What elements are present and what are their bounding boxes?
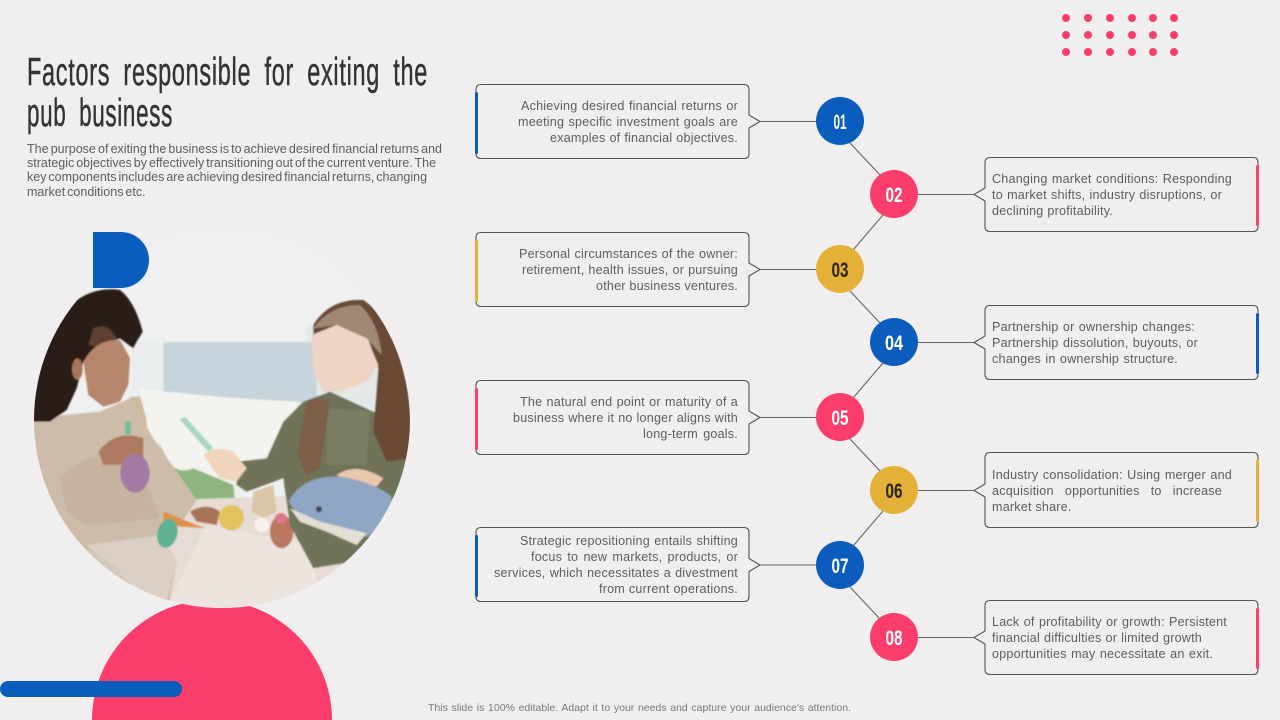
node 04: 04 (885, 332, 903, 355)
decorative pink semicircle (92, 600, 332, 720)
node 02: 02 (886, 184, 902, 207)
connector lines (760, 122, 974, 638)
intro text: key components includes are achieving desired financial returns, changing (27, 170, 427, 184)
decorative blue bar (0, 681, 182, 697)
card 04 (974, 306, 1259, 380)
left hand, eggplant (98, 435, 143, 465)
node 06: 06 (886, 480, 902, 503)
whale (288, 477, 392, 537)
card 01: Achieving desired financial returns or (521, 99, 738, 113)
card 08: opportunities may necessitate an exit. (992, 647, 1213, 661)
right girl hair (313, 300, 412, 462)
card 07: from current operations. (599, 582, 738, 596)
photo: two children playing with toys (34, 288, 410, 608)
node 03: 03 (832, 259, 848, 282)
intro text: market conditions etc. (27, 185, 146, 199)
card 04: Partnership dissolution, buyouts, or (992, 336, 1198, 350)
card 03: retirement, health issues, or pursuing (522, 263, 738, 277)
title: pub business (27, 92, 173, 135)
card 04: changes in ownership structure. (992, 352, 1178, 366)
intro text: The purpose of exiting the business is to achieve desired financial returns and (27, 142, 442, 156)
intro text (27, 142, 447, 202)
title: Factors responsible for exiting the (27, 51, 428, 94)
title (27, 51, 428, 135)
card 05: long-term goals. (643, 427, 738, 441)
left girl face (83, 340, 130, 407)
card 05 (475, 380, 760, 454)
floor (170, 496, 392, 600)
card 08: Lack of profitability or growth: Persistent (992, 615, 1227, 629)
decorative blue D shape (93, 232, 149, 288)
node 01 (816, 97, 864, 145)
card 04: Partnership or ownership changes: (992, 320, 1195, 334)
node 02 (870, 170, 918, 218)
node 08 (870, 613, 918, 661)
toys (163, 512, 205, 528)
card 02: Changing market conditions: Responding (992, 172, 1232, 186)
card 08: financial difficulties or limited growth (992, 631, 1202, 645)
card 08 (974, 600, 1259, 674)
card 03: other business ventures. (596, 279, 738, 293)
card 05: business where it no longer aligns with (513, 411, 738, 425)
card 03 (475, 232, 760, 306)
node 05 (816, 393, 864, 441)
card 07 (475, 528, 760, 602)
node 01: 01 (834, 111, 847, 134)
right girl dress (237, 392, 413, 568)
card 06: acquisition opportunities to increase (992, 484, 1222, 498)
card 02: to market shifts, industry disruptions, or (992, 188, 1222, 202)
node 06 (870, 466, 918, 514)
card 06 (974, 452, 1259, 528)
card 07: services, which necessitates a divestment (494, 566, 738, 580)
card 02 (974, 158, 1259, 232)
right hand (203, 449, 247, 482)
card 01 (475, 84, 760, 158)
node 03 (816, 245, 864, 293)
card 02: declining profitability. (992, 204, 1113, 218)
decorative dot grid (1062, 14, 1178, 56)
card 07: focus to new markets, products, or (531, 550, 738, 564)
card 06: market share. (992, 500, 1072, 514)
card 03: Personal circumstances of the owner: (519, 247, 738, 261)
intro text: strategic objectives by effectively transitioning out of the current venture. The (27, 156, 436, 170)
card 05: The natural end point or maturity of a (520, 395, 738, 409)
card 01: examples of financial objectives. (550, 131, 738, 145)
left girl dress (34, 398, 197, 600)
left girl hair (31, 289, 143, 422)
right girl face (312, 325, 378, 392)
footer note: This slide is 100% editable. Adapt it to your needs and capture your audience's attention. (428, 702, 851, 714)
card 06: Industry consolidation: Using merger and (992, 468, 1232, 482)
card 01: meeting specific investment goals are (518, 115, 738, 129)
node 05: 05 (832, 407, 849, 430)
node 04 (870, 318, 918, 366)
node 07 (816, 541, 864, 589)
card 07: Strategic repositioning entails shifting (520, 534, 738, 548)
node 07: 07 (832, 555, 848, 578)
node 08: 08 (886, 627, 903, 650)
